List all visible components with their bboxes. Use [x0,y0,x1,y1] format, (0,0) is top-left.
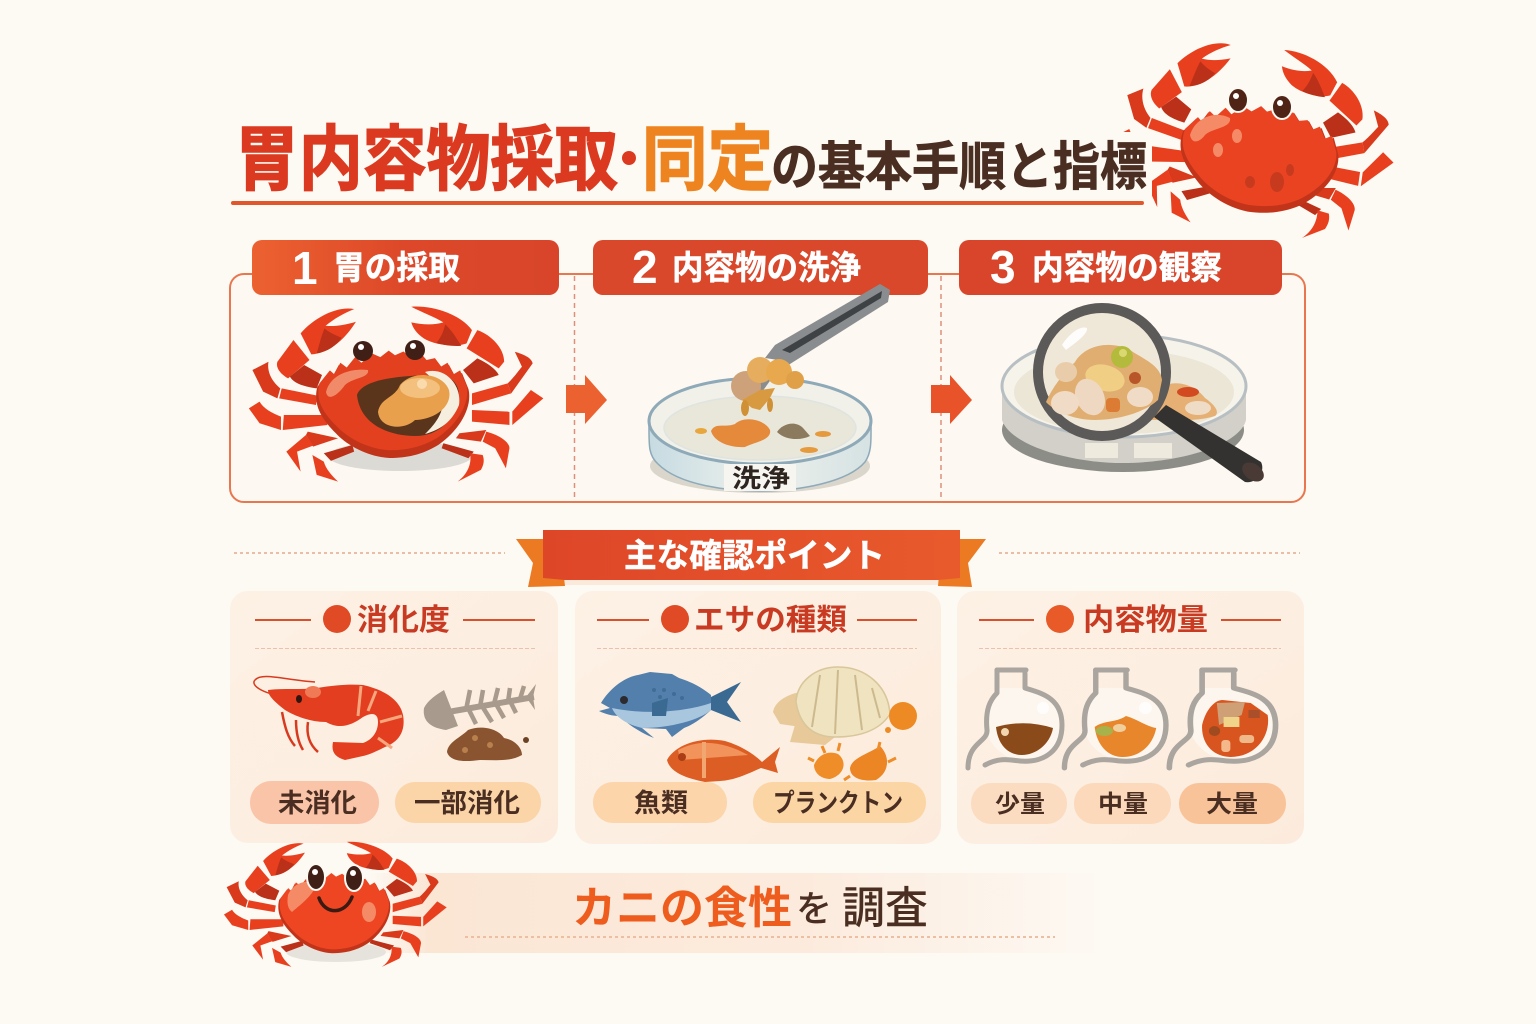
step 2 heading: 内容物の洗浄 [672,249,861,286]
title [235,121,1147,200]
icon: orange fish [667,740,780,782]
conclusion band: カニの食性 [572,884,792,933]
arrow: step 2 to 3 [931,375,972,424]
step 3 heading: 3 [990,241,1016,293]
title: 胃内容物採取 [235,121,618,200]
icon: fish bone [424,684,536,730]
section ribbon heading: 主な確認ポイント [624,537,885,574]
panel: content amount [957,591,1304,844]
icon: header crab [1124,43,1394,238]
icon: partly digested mass [447,728,529,761]
tweezers [757,284,890,392]
step 2 heading: 2 [632,241,658,293]
section divider right [999,552,1300,554]
step 1 heading: 胃の採取 [333,249,460,286]
panel: digestion degree: 消化度 [357,604,450,637]
gripped food [731,357,804,416]
illustration: crab with opened shell and stomach [249,307,543,482]
panel: digestion degree [230,591,558,843]
icon: plankton [808,742,896,780]
icon: smiling crab [224,842,447,967]
section ribbon heading [516,530,986,587]
panel: bait types [575,591,941,844]
title underline [231,201,1144,205]
wash label: 洗浄 [732,465,790,493]
icon: shell [773,667,917,745]
panel: three steps [230,274,1305,502]
icon: stomach medium amount [1064,670,1166,768]
icon: blue fish [599,672,741,738]
pill: undigested: 未消化 [278,788,357,818]
pill: undigested [250,781,379,824]
pill: small: 少量 [995,791,1045,818]
pill: large [1179,783,1286,824]
section divider left [234,552,505,554]
pill: plankton: プランクトン [773,788,903,818]
icon: stomach small amount [968,670,1062,768]
conclusion band [370,873,1100,953]
pill: partly digested [395,782,541,823]
step 1 heading: 1 [292,242,318,294]
illustration: petri dish and tweezers [649,284,890,493]
step 3 heading [959,240,1282,295]
infographic canvas [224,43,1394,967]
illustration: magnifier over petri dish [1002,308,1267,485]
step 2 heading [593,240,928,295]
icon: stomach large amount [1169,670,1276,768]
pill: large: 大量 [1206,791,1258,818]
step 3 heading: 内容物の観察 [1032,249,1222,286]
panel: bait types: エサの種類 [694,604,847,637]
title: 同定 [642,121,773,200]
arrow: step 1 to 2 [566,375,607,424]
conclusion band: 調査 [842,884,928,933]
pill: plankton [753,782,926,823]
pill: medium: 中量 [1098,791,1148,818]
conclusion band: を [796,888,832,929]
icon: shrimp [254,677,404,760]
pill: fish: 魚類 [634,788,688,818]
pill: fish [593,782,727,823]
pill: small [971,783,1067,824]
step 1 heading [252,240,559,295]
title: の基本手順と指標 [771,139,1147,197]
pill: partly digested: 一部消化 [414,788,520,818]
panel: content amount: 内容物量 [1083,604,1208,637]
pill: medium [1074,783,1171,824]
